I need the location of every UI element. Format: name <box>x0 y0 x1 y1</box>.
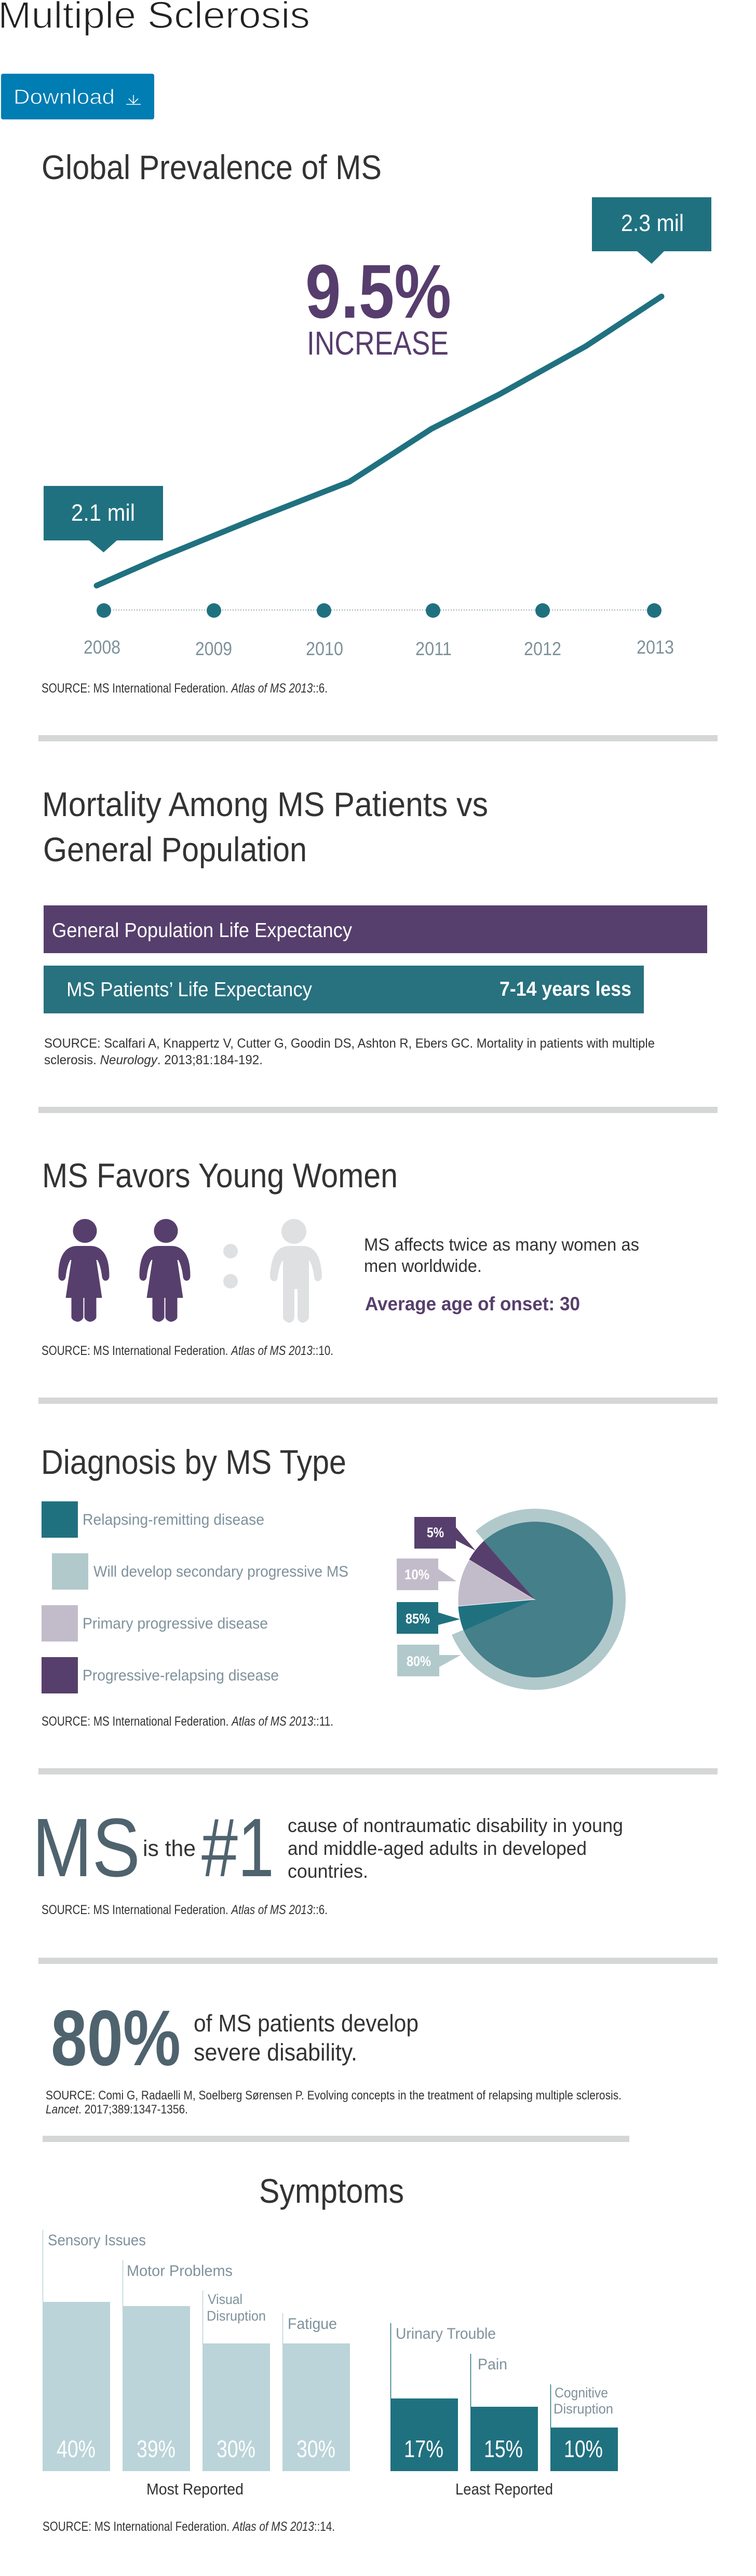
callout: 5% <box>414 1517 476 1551</box>
source <box>44 1036 655 1067</box>
source: SOURCE: MS International Federation. Atlas of MS 2013::10. <box>42 1344 333 1358</box>
panel: global prevalence <box>42 148 711 696</box>
bar: general population: General Population Life Expectancy <box>52 919 352 942</box>
source: SOURCE: MS International Federation. Atlas of MS 2013::6. <box>42 1903 328 1917</box>
big stat: 9.5% increase <box>305 249 451 362</box>
big stat: 9.5% increase: INCREASE <box>307 324 449 362</box>
bar: motor problems 39% <box>123 2260 233 2471</box>
heading: Symptoms <box>259 2172 404 2210</box>
statement: MS affects twice as many women as <box>364 1235 639 1255</box>
bar: pain 15% <box>470 2354 538 2471</box>
statement <box>364 1235 639 1276</box>
panel: severe disability <box>46 1994 622 2117</box>
bar: MS patients: 7-14 years less <box>500 978 631 1000</box>
average age of onset: Average age of onset: 30 <box>365 1293 580 1314</box>
bar: visual disruption 30%: Disruption <box>207 2308 266 2324</box>
callout: 2.1 mil <box>44 486 163 552</box>
year labels <box>84 636 674 659</box>
bar: fatigue 30% <box>282 2313 350 2471</box>
bar: urinary trouble 17% <box>390 2323 496 2471</box>
heading <box>42 785 488 869</box>
bar: pain 15%: 15% <box>484 2435 523 2462</box>
group label: most reported: Most Reported <box>146 2480 244 2498</box>
line chart <box>97 296 662 586</box>
bar: cognitive disruption 10% <box>550 2384 618 2471</box>
legend: Will develop secondary progressive MS <box>93 1563 348 1580</box>
statement: cause of nontraumatic disability in young <box>288 1815 623 1836</box>
legend: Primary progressive disease <box>83 1615 268 1632</box>
big stat: 80%: 80% <box>51 1994 181 2082</box>
callout: 2.3 mil: 2.3 mil <box>621 210 684 236</box>
source: SOURCE: MS International Federation. Atlas of MS 2013::6. <box>42 681 328 696</box>
bar: MS patients <box>44 966 644 1013</box>
source: sclerosis. Neurology. 2013;81:184-192. <box>44 1053 263 1067</box>
bar: visual disruption 30%: 30% <box>217 2435 255 2462</box>
year labels: 2008 <box>84 636 120 658</box>
source: Lancet. 2017;389:1347-1356. <box>46 2103 188 2117</box>
bar: sensory issues 40% <box>43 2230 146 2471</box>
year labels: 2009 <box>195 638 232 659</box>
bar: visual disruption 30% <box>203 2290 270 2471</box>
statement <box>288 1815 623 1882</box>
statement: countries. <box>288 1861 368 1882</box>
source: SOURCE: Comi G, Radaelli M, Soelberg Sørensen P. Evolving concepts in the treatment of relapsing multiple sclerosis. <box>46 2089 622 2103</box>
callout: 2.3 mil <box>592 197 711 264</box>
heading: Diagnosis by MS Type <box>41 1443 346 1481</box>
legend: Relapsing-remitting disease <box>83 1511 264 1528</box>
bar: motor problems 39%: Motor Problems <box>127 2262 233 2280</box>
source: SOURCE: Scalfari A, Knappertz V, Cutter G, Goodin DS, Ashton R, Ebers GC. Mortality in patients with multiple <box>44 1036 655 1051</box>
statement: of MS patients develop <box>194 2010 419 2037</box>
bar: general population <box>44 905 707 953</box>
bar: motor problems 39%: 39% <box>137 2435 176 2462</box>
statement <box>194 2010 419 2066</box>
download button <box>1 74 154 119</box>
bar: fatigue 30%: 30% <box>296 2435 335 2462</box>
panel: diagnosis by type <box>41 1443 626 1729</box>
callout: 5%: 5% <box>427 1525 444 1540</box>
panel: mortality <box>42 785 707 1067</box>
source: SOURCE: MS International Federation. Atlas of MS 2013::14. <box>43 2519 335 2534</box>
callout: 10% <box>397 1558 456 1590</box>
icon: woman <box>139 1219 190 1322</box>
bar: sensory issues 40%: 40% <box>57 2435 96 2462</box>
bar: cognitive disruption 10%: Disruption <box>554 2401 613 2417</box>
callout: 80%: 80% <box>407 1653 431 1669</box>
statement: men worldwide. <box>364 1256 482 1276</box>
year labels: 2013 <box>637 636 674 658</box>
pie chart <box>452 1509 626 1690</box>
bar: sensory issues 40%: Sensory Issues <box>48 2232 146 2249</box>
is the: is the <box>143 1836 196 1861</box>
heading: MS Favors Young Women <box>42 1156 398 1195</box>
heading: Global Prevalence of MS <box>42 148 382 186</box>
callout: 10%: 10% <box>404 1567 429 1582</box>
big stat: 9.5% increase: 9.5% <box>305 249 451 334</box>
timeline axis <box>97 603 662 618</box>
big MS: MS <box>32 1801 140 1894</box>
bar: cognitive disruption 10%: 10% <box>564 2435 603 2462</box>
statement: and middle-aged adults in developed <box>288 1838 587 1859</box>
source: SOURCE: MS International Federation. Atlas of MS 2013::11. <box>42 1714 333 1729</box>
callout: 85%: 85% <box>406 1611 430 1626</box>
callout: 2.1 mil: 2.1 mil <box>71 499 135 526</box>
year labels: 2010 <box>306 638 343 659</box>
bar: urinary trouble 17%: 17% <box>404 2435 443 2462</box>
year labels: 2012 <box>524 638 561 659</box>
icon: woman <box>58 1219 109 1322</box>
source <box>46 2089 622 2117</box>
year labels: 2011 <box>415 638 452 659</box>
bar: pain 15%: Pain <box>478 2356 507 2373</box>
bar: urinary trouble 17%: Urinary Trouble <box>396 2325 496 2342</box>
legend <box>42 1501 348 1693</box>
heading: Mortality Among MS Patients vs <box>42 785 488 823</box>
icon: ratio colon <box>223 1244 238 1289</box>
bar: MS patients: MS Patients’ Life Expectancy <box>66 979 312 1001</box>
bar: visual disruption 30%: Visual <box>208 2292 242 2307</box>
bar: fatigue 30%: Fatigue <box>288 2315 337 2333</box>
panel: leading cause of disability <box>32 1801 623 1917</box>
icon: man <box>270 1219 322 1323</box>
bar: cognitive disruption 10%: Cognitive <box>555 2385 608 2401</box>
statement: severe disability. <box>194 2039 357 2066</box>
heading: General Population <box>43 830 307 869</box>
callout: 80% <box>397 1645 461 1676</box>
callout: 85% <box>397 1602 460 1634</box>
download button: Download <box>14 86 115 109</box>
group label: least reported: Least Reported <box>455 2480 553 2498</box>
panel: favors young women <box>42 1156 639 1358</box>
panel: symptoms <box>43 2172 618 2534</box>
big #1: #1 <box>201 1801 274 1894</box>
legend: Progressive-relapsing disease <box>83 1667 279 1684</box>
